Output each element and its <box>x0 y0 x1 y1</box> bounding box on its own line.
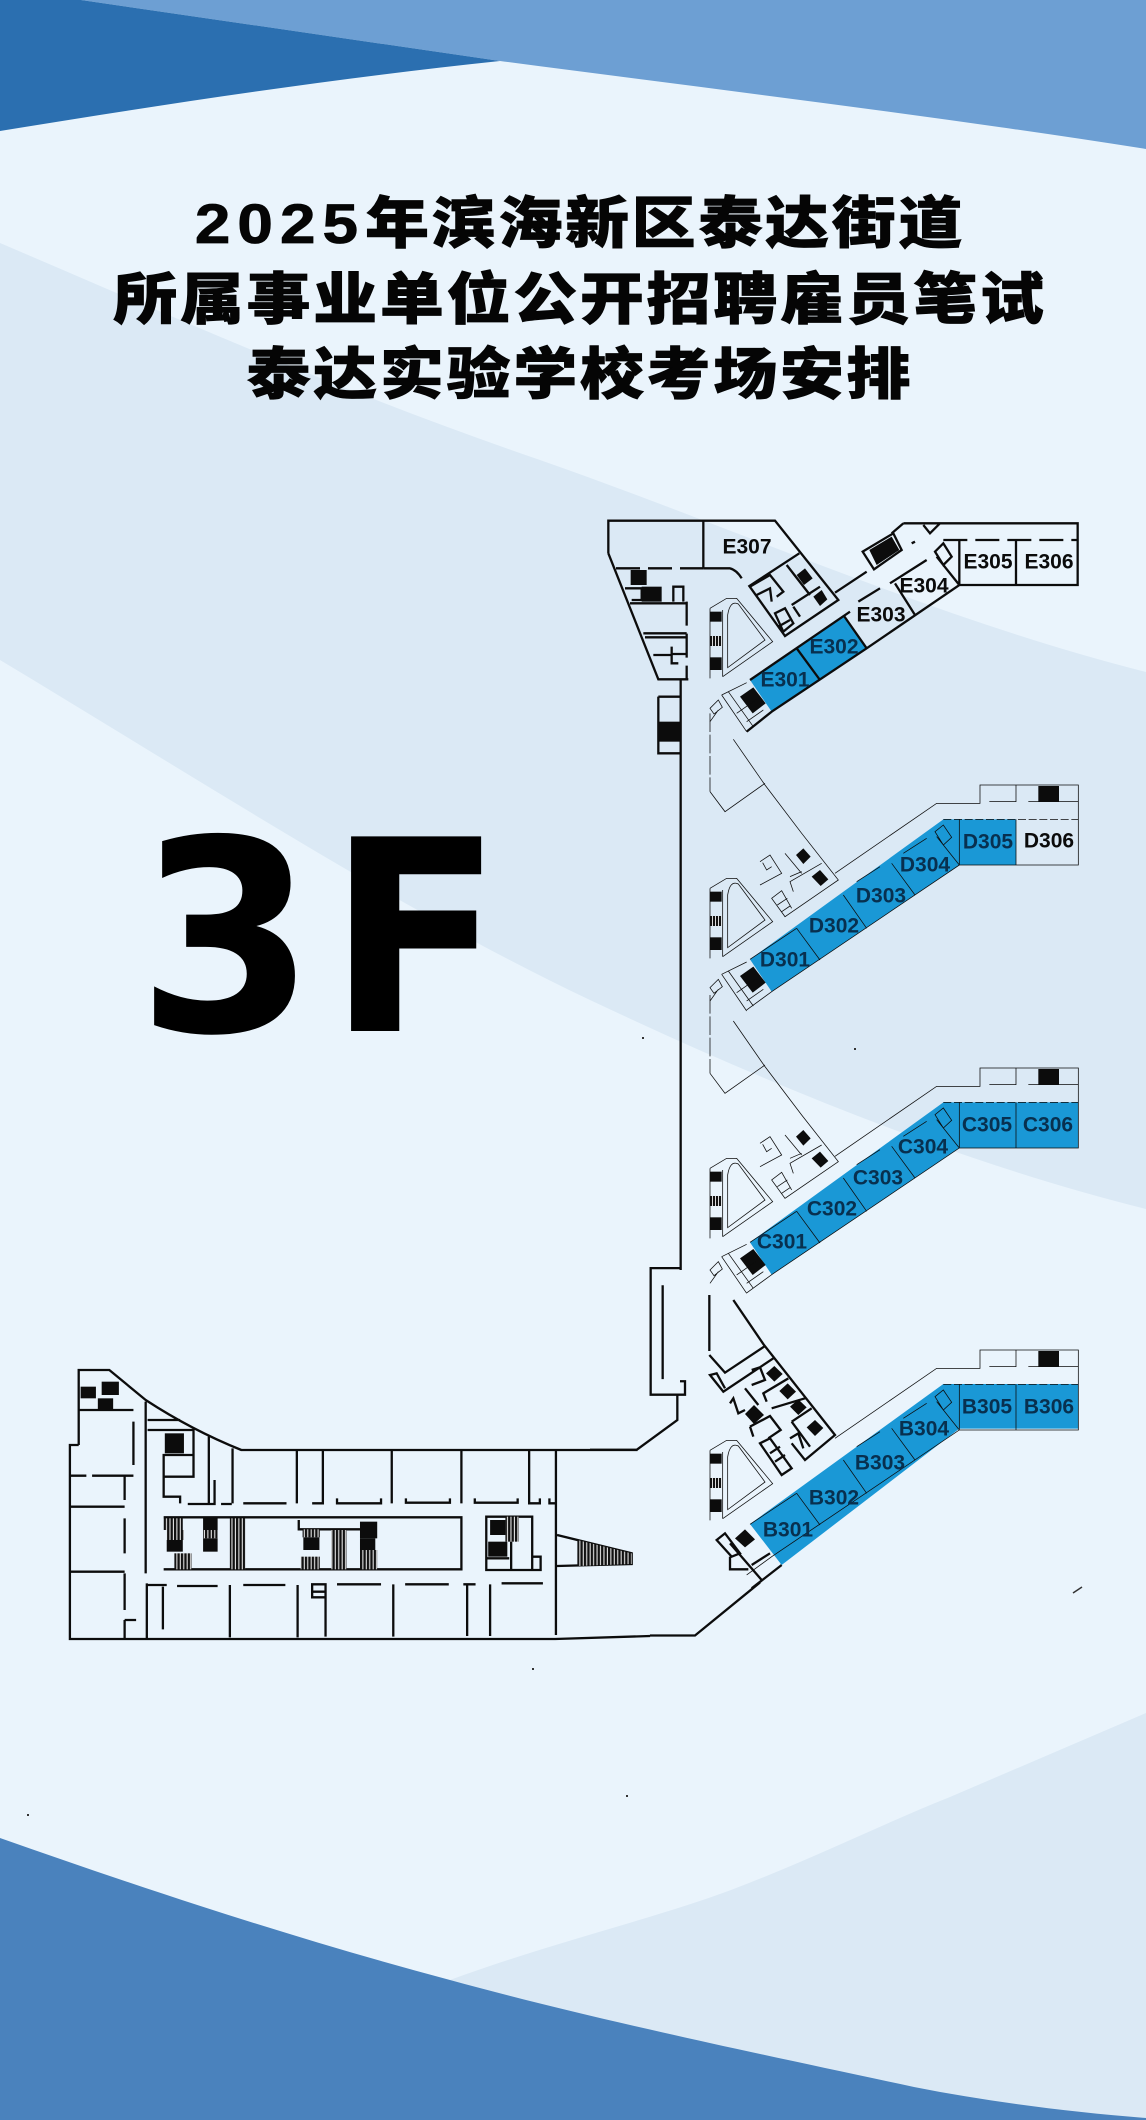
background: top left dark-blue shape <box>0 0 500 131</box>
room labels: wing D: D302 <box>809 914 859 938</box>
room labels: wing B: B305 <box>962 1396 1012 1418</box>
room labels: wing D: D303 <box>856 884 906 908</box>
room labels: wing B: B303 <box>855 1452 905 1474</box>
room labels: wing D: D305 <box>963 830 1013 854</box>
title: 泰达实验学校考场安排 <box>247 344 913 406</box>
room labels: wing B: B306 <box>1024 1396 1074 1418</box>
title: 2025年滨海新区泰达街道 <box>195 193 965 255</box>
wing fronts <box>747 785 1078 1010</box>
room labels: wing C <box>757 1114 1073 1254</box>
background: top right light-blue shape <box>81 0 1146 149</box>
room labels: wing C: C303 <box>853 1166 903 1190</box>
room labels: wing D: D304 <box>900 854 950 876</box>
title <box>113 193 1047 406</box>
room labels: wing B: B302 <box>809 1486 859 1510</box>
room labels: wing B <box>763 1396 1074 1542</box>
room labels: wing B: B301 <box>763 1518 813 1542</box>
triangle courtyards <box>710 598 773 678</box>
blue exam rooms <box>750 615 1078 1565</box>
room labels: wing C: C306 <box>1023 1114 1073 1136</box>
room labels: wing E <box>722 536 1074 692</box>
room labels: wing E: E303 <box>856 604 906 626</box>
title: 所属事业单位公开招聘雇员笔试 <box>113 269 1047 331</box>
room labels: wing E: E306 <box>1024 550 1074 574</box>
scan specks <box>27 1037 1082 1816</box>
floor plan: east wings E D C <box>608 520 1078 1575</box>
room labels: wing B: B304 <box>899 1418 949 1440</box>
background band: middle diagonal <box>0 243 1146 1209</box>
room labels: wing D: D301 <box>760 948 810 972</box>
wing E outline <box>608 520 1078 732</box>
room labels: wing C: C301 <box>757 1230 807 1254</box>
floor label: 3F: 3F <box>137 783 503 1094</box>
background: bottom right pale shape <box>450 1713 1146 2120</box>
room labels: wing D: D306 <box>1024 830 1074 852</box>
room labels: wing E: E302 <box>809 636 859 658</box>
floor plan: B wing back block and south stair <box>709 1295 835 1588</box>
spine and small stair <box>658 680 681 1270</box>
background: bottom dark-blue curve <box>0 1838 1146 2120</box>
room labels: wing C: C304 <box>898 1136 948 1158</box>
room labels: wing E: E304 <box>899 574 949 598</box>
room labels: wing E: E307 <box>722 536 772 558</box>
room labels: wing D <box>760 830 1074 972</box>
room labels: wing E: E301 <box>760 668 810 692</box>
room labels: wing E: E305 <box>963 550 1013 574</box>
room labels: wing C: C302 <box>807 1198 857 1220</box>
floor plan: lower spine entrance and south wall <box>590 1268 760 1636</box>
stair blocks <box>710 683 766 732</box>
joints <box>710 713 838 917</box>
floor plan: west wing <box>70 1370 650 1639</box>
room labels: wing C: C305 <box>962 1114 1012 1136</box>
